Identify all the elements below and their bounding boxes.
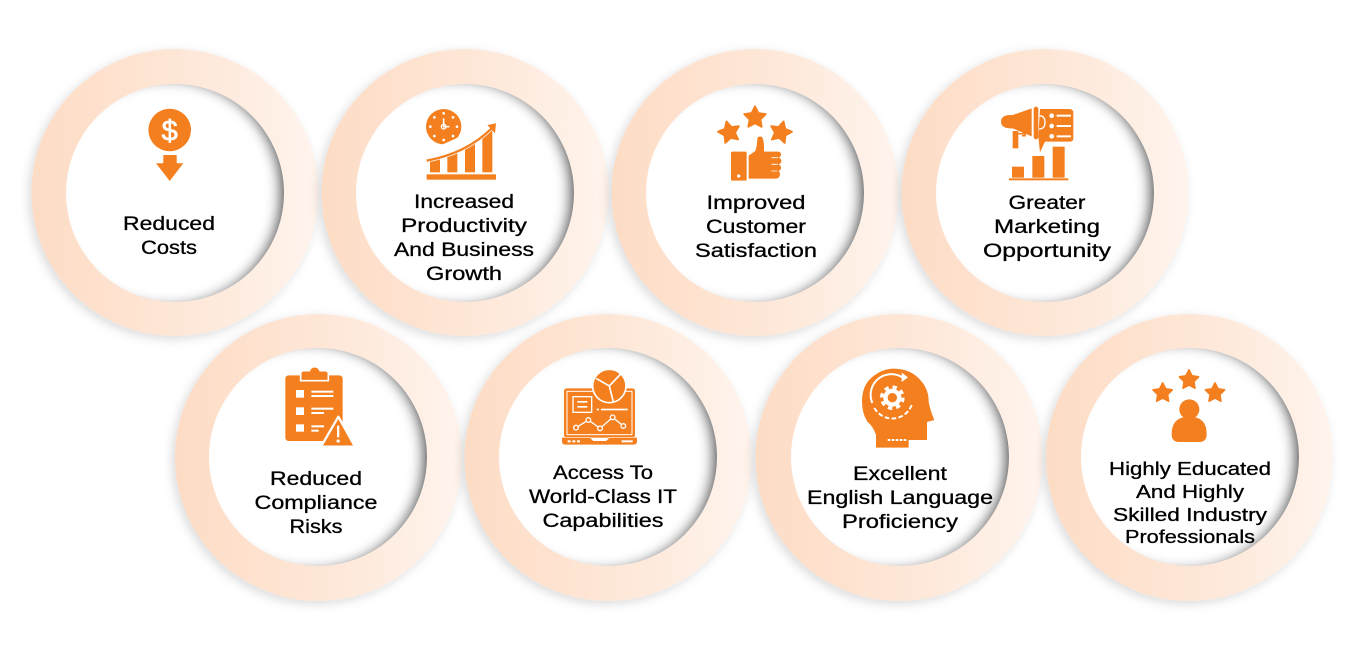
label: Customer: [706, 216, 807, 238]
label: [695, 192, 817, 262]
card: increased productivity: [322, 49, 608, 336]
card: improved customer satisfaction: [612, 49, 898, 336]
ring: [464, 314, 752, 601]
icon: clipboard with warning: [285, 367, 355, 447]
card: access to IT capabilities: [464, 314, 752, 601]
ring: [32, 49, 318, 336]
label: Satisfaction: [695, 240, 817, 262]
label: [123, 213, 215, 259]
label: Greater: [1008, 192, 1086, 214]
label: Risks: [290, 516, 343, 538]
label: Professionals: [1125, 526, 1255, 547]
label: Productivity: [401, 215, 527, 237]
card: excellent english proficiency: [756, 314, 1042, 601]
label: [529, 462, 677, 532]
icon: laptop with pie chart: [562, 369, 637, 445]
label: Excellent: [853, 463, 948, 485]
card: greater marketing opportunity: [902, 49, 1188, 336]
ring: [756, 314, 1042, 601]
icon: head with gear: [862, 369, 934, 448]
label: English Language: [807, 487, 993, 509]
label: Marketing: [994, 216, 1100, 238]
inner disc: [356, 84, 574, 302]
label: Reduced: [270, 468, 362, 490]
label: Costs: [141, 237, 197, 259]
card: reduced costs: [32, 49, 318, 336]
inner disc: [791, 348, 1009, 566]
ring: [612, 49, 898, 336]
label: Access To: [553, 462, 653, 484]
icon: clock and growth chart: [423, 95, 540, 195]
ring: [175, 314, 462, 601]
label: Improved: [706, 192, 806, 214]
label: And Business: [394, 239, 534, 261]
label: And Highly: [1136, 481, 1245, 502]
inner disc: [209, 348, 427, 566]
label: Reduced: [123, 213, 215, 235]
inner disc: [66, 84, 284, 302]
label: Opportunity: [983, 240, 1111, 262]
card: highly educated professionals: [1046, 314, 1333, 601]
inner disc: [646, 84, 864, 302]
icon: megaphone and bars: [1001, 107, 1073, 180]
icon: person with stars: [1153, 370, 1225, 442]
label: Skilled Industry: [1113, 504, 1268, 525]
ring: [1046, 314, 1333, 601]
label: [394, 191, 534, 285]
label: [1109, 458, 1271, 547]
inner disc: [499, 348, 717, 566]
ring: [322, 49, 608, 336]
label: Proficiency: [842, 511, 958, 533]
label: Capabilities: [542, 510, 664, 532]
inner disc: [936, 84, 1154, 302]
label: Compliance: [254, 492, 378, 514]
label: Growth: [426, 263, 502, 285]
label: World-Class IT: [529, 486, 677, 508]
label: Highly Educated: [1109, 458, 1271, 479]
card: reduced compliance risks: [175, 314, 462, 601]
inner disc: [1081, 348, 1299, 566]
icon: dollar with down arrow: $: [162, 116, 178, 148]
icon: stars and thumbs up: [716, 106, 794, 181]
label: [254, 468, 378, 538]
ring: [902, 49, 1188, 336]
label: Increased: [414, 191, 514, 213]
label: [983, 192, 1111, 262]
icon: dollar with down arrow: [148, 109, 191, 181]
label: [807, 463, 993, 533]
